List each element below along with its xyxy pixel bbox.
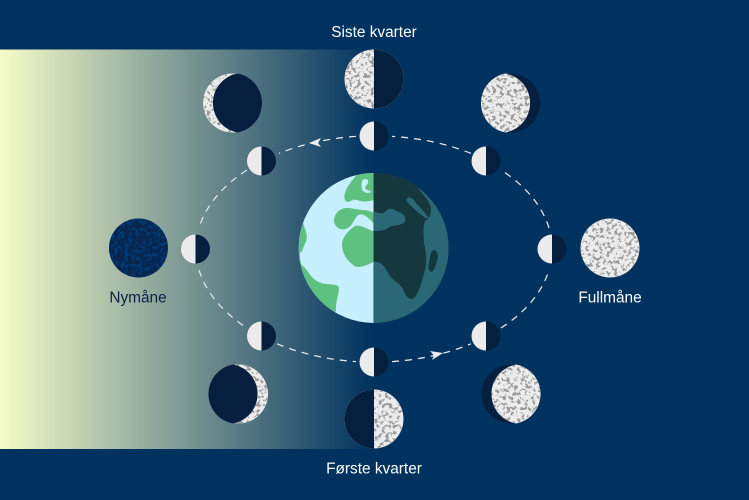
earth: day side bbox=[298, 173, 374, 323]
label: Første kvarter: Første kvarter bbox=[326, 460, 422, 478]
small moon: upper right bbox=[472, 146, 500, 176]
moon phase: last quarter bbox=[344, 49, 404, 109]
small moon: top bbox=[360, 122, 388, 150]
label: Siste kvarter: Siste kvarter bbox=[331, 24, 417, 41]
earth: night side bbox=[374, 173, 448, 323]
sunlight gradient band bbox=[0, 50, 374, 449]
small moon: bottom bbox=[360, 348, 388, 376]
small moon: upper left bbox=[247, 146, 276, 176]
label: Nymåne: Nymåne bbox=[109, 290, 167, 306]
earth bbox=[298, 173, 448, 323]
small moon: left bbox=[181, 234, 210, 264]
moon phase: first quarter bbox=[344, 389, 404, 449]
small moon: lower left bbox=[247, 322, 276, 350]
arrow: lower orbit direction bbox=[430, 351, 443, 360]
moon phase: new moon bbox=[108, 218, 169, 278]
moon phase: waning crescent bbox=[203, 73, 263, 133]
small moon: right bbox=[538, 234, 566, 264]
label: Fullmåne: Fullmåne bbox=[578, 290, 642, 306]
orbit: dashed ellipse with arrows bbox=[199, 136, 549, 362]
arrow: upper orbit direction bbox=[309, 138, 321, 147]
moon phase: waxing gibbous bbox=[482, 364, 542, 424]
moon phase: waxing crescent bbox=[208, 364, 269, 424]
moon phase: full moon bbox=[580, 218, 640, 278]
small moon: lower right bbox=[472, 322, 500, 350]
moon phase: waning gibbous bbox=[480, 73, 540, 133]
